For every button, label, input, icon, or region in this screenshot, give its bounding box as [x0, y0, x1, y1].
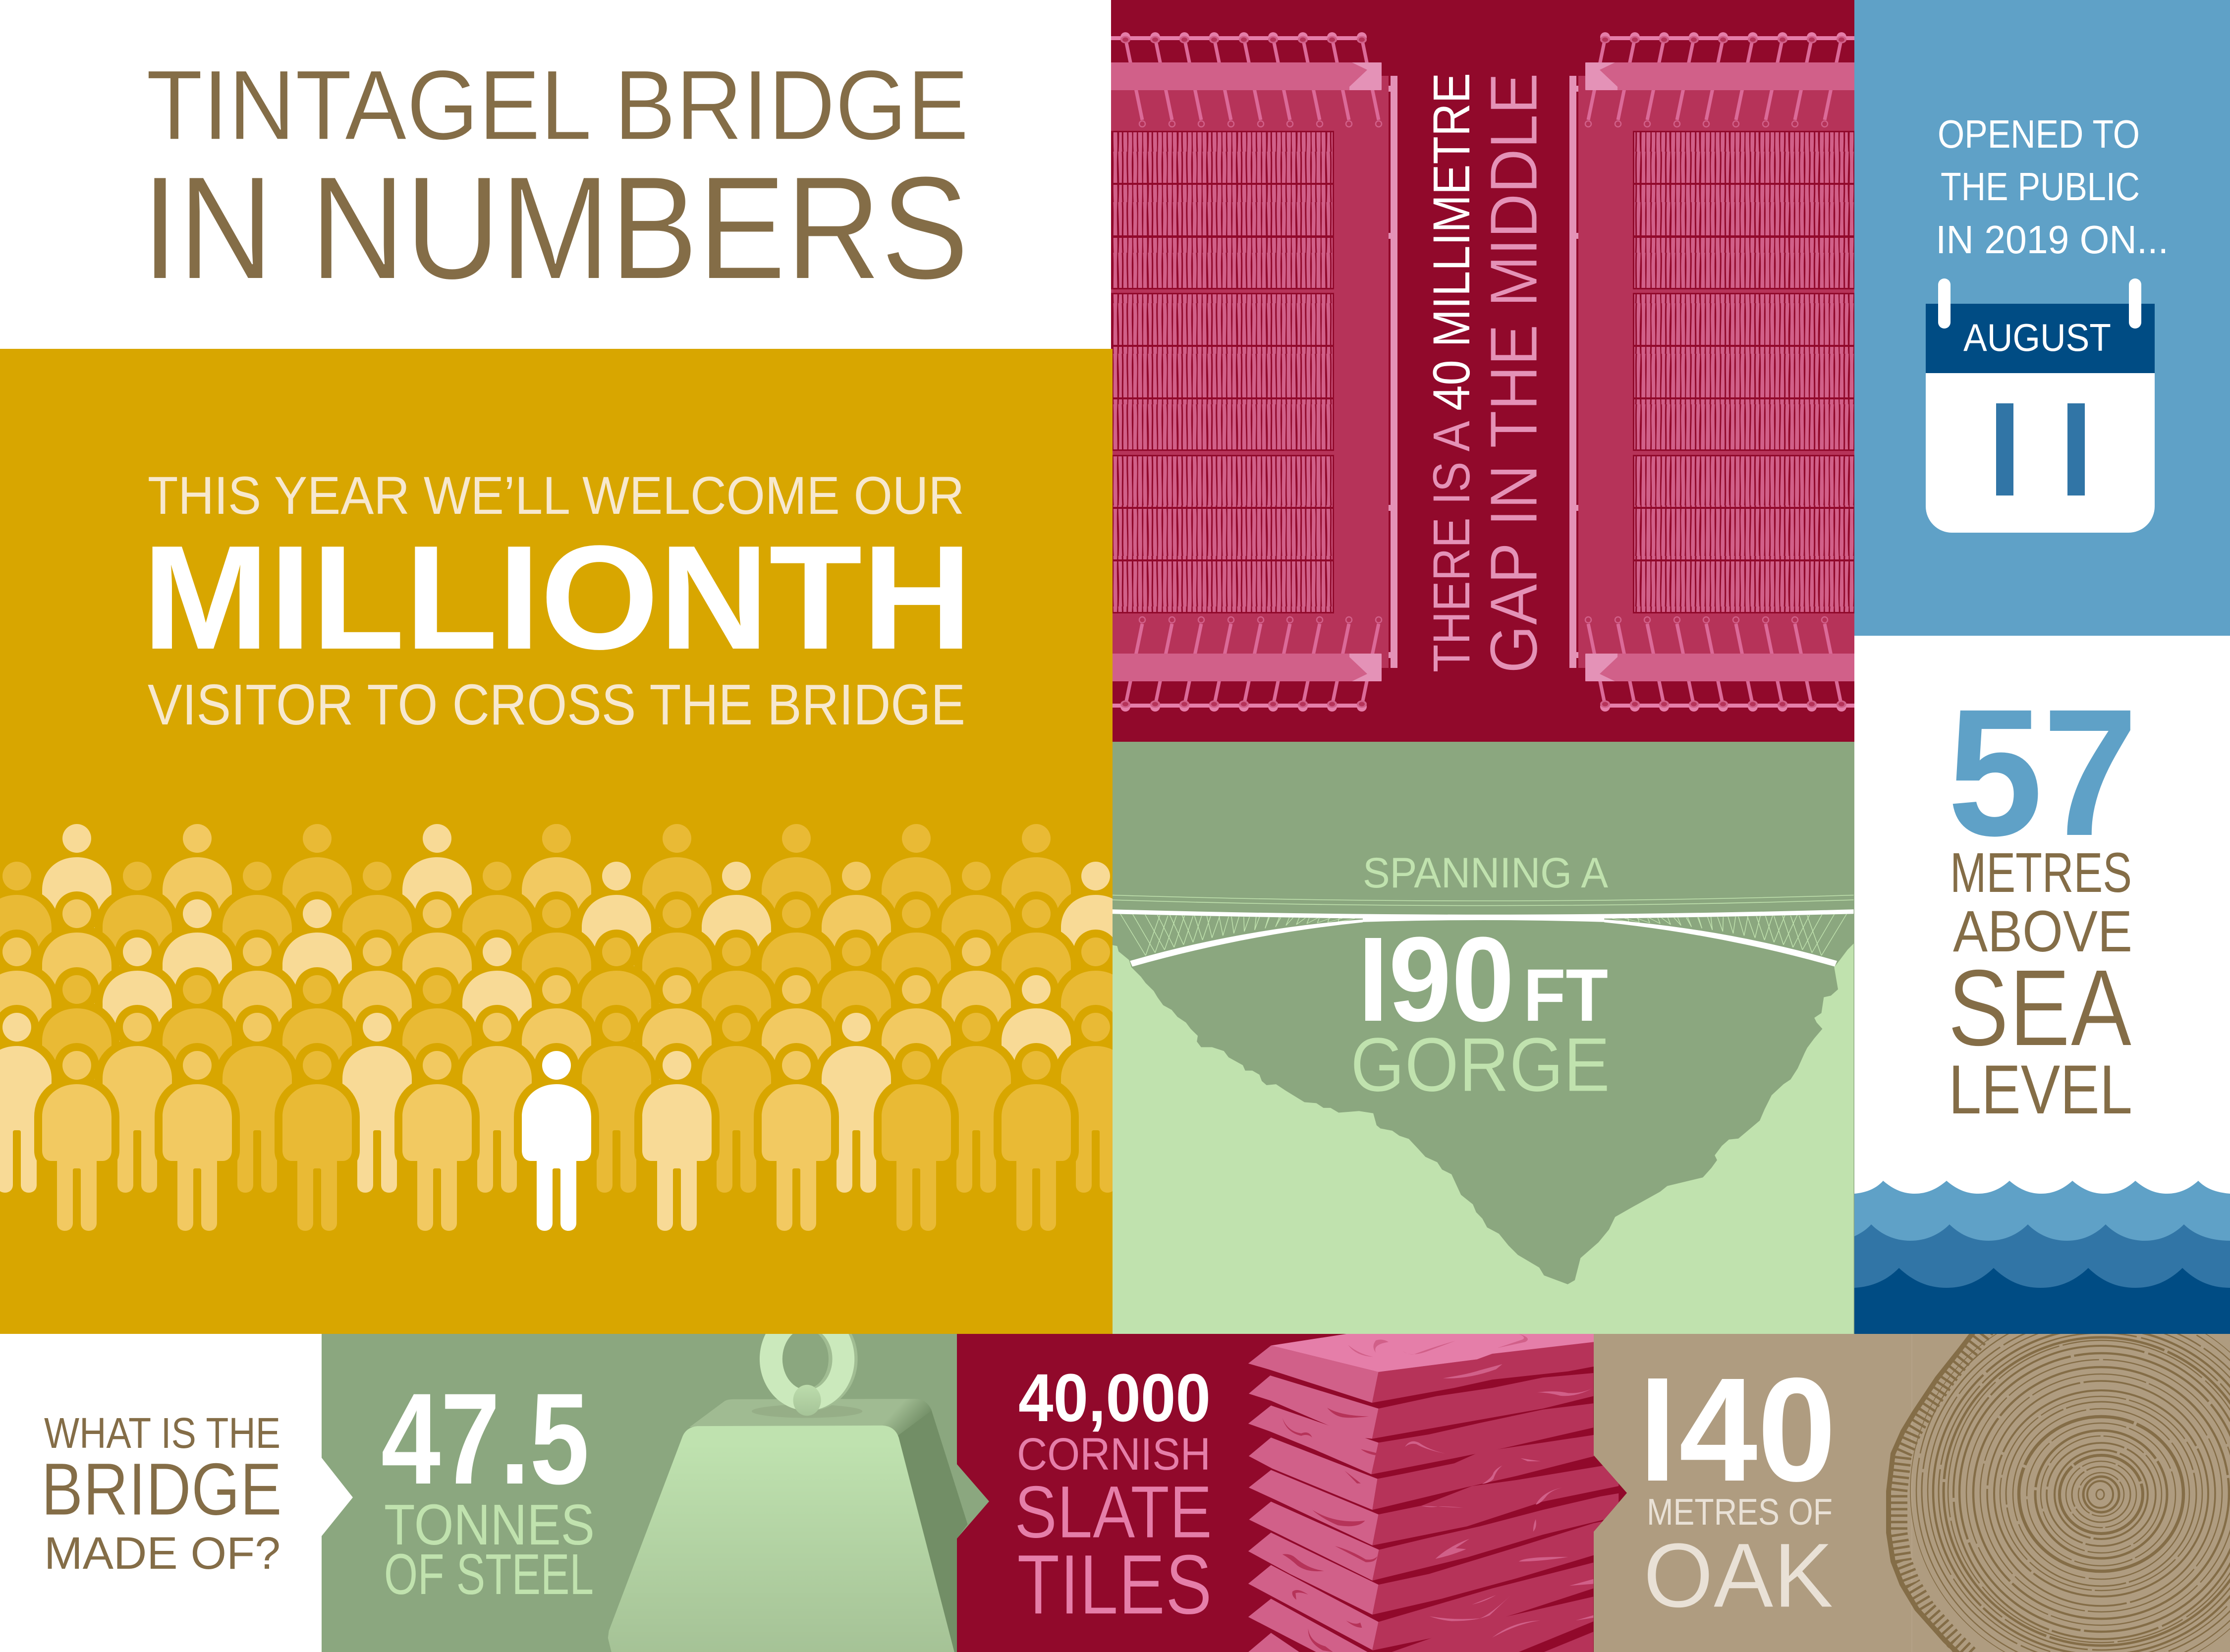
text: opened to the public	[1936, 112, 2169, 262]
text: gorge: GORGE	[1350, 1022, 1610, 1107]
bridge deck halves	[1090, 32, 1877, 712]
panel: oak	[1594, 1303, 2230, 1652]
text: oak: OAK	[1643, 1525, 1834, 1627]
text: metres above sea level	[1948, 841, 2132, 1128]
panel: title	[0, 0, 1111, 349]
weight front	[608, 1426, 955, 1652]
growth rings	[1910, 1303, 2230, 1652]
number: 47.5: 47.5	[381, 1366, 589, 1511]
illustration: tree rings	[1889, 1303, 2230, 1652]
weight ring	[763, 1307, 858, 1411]
text: of steel: OF STEEL	[384, 1542, 594, 1606]
number: 140: 1	[1615, 1347, 1697, 1512]
text: this year we'll welcome our: THIS YEAR WE’LL WELCOME OUR	[148, 465, 964, 525]
heading: millionth: MILLIONTH	[142, 515, 972, 680]
text: metres above sea level: SEA	[1948, 946, 2132, 1069]
number: 190 ft: 1	[1333, 912, 1400, 1046]
arrow: white pointer	[322, 1458, 353, 1536]
heading: in numbers: IN NUMBERS	[142, 146, 969, 310]
bridge deck and arch	[1113, 909, 1854, 967]
text: what is the bridge made of?: MADE OF?	[44, 1528, 280, 1579]
illustration: weight	[608, 1307, 968, 1652]
panel: slate tiles	[957, 1332, 1644, 1652]
text: metres above sea level: ABOVE	[1953, 899, 2132, 964]
panel: millionth visitor	[0, 349, 1130, 1334]
weight shadow	[752, 1405, 862, 1418]
text: metres above sea level: LEVEL	[1949, 1050, 2132, 1128]
weight top	[689, 1399, 932, 1435]
weight side	[881, 1399, 968, 1652]
text: tonnes: TONNES	[384, 1492, 595, 1557]
text: gap in the middle: GAP IN THE MIDDLE	[1476, 73, 1551, 673]
bark	[1889, 1328, 1986, 1652]
calendar day: 11	[1965, 375, 2111, 524]
text: metres of: METRES OF	[1647, 1491, 1833, 1533]
panel: gorge	[1113, 742, 1854, 1334]
text: tiles: TILES	[1017, 1537, 1212, 1632]
white figure: millionth visitor	[522, 1051, 591, 1231]
top tile	[1271, 1332, 1644, 1372]
calendar month: AUGUST	[1963, 316, 2111, 359]
illustration: stack of slate tiles	[1248, 1332, 1644, 1652]
icon: calendar	[1926, 278, 2155, 533]
number: 190 ft	[1365, 936, 1608, 1022]
number: 40,000: 40,000	[1018, 1360, 1211, 1436]
text: metres above sea level: METRES	[1950, 841, 2132, 904]
number: 140	[1615, 1347, 1836, 1512]
number: 140: 40	[1679, 1347, 1836, 1512]
text: opened to the public: OPENED TO	[1938, 112, 2140, 156]
text: opened to the public: THE PUBLIC	[1941, 165, 2140, 209]
text: what is the bridge made of?: BRIDGE	[41, 1447, 282, 1531]
panel: opening date	[1854, 0, 2230, 636]
weight knob	[793, 1385, 821, 1416]
panel: height above sea level	[1854, 636, 2230, 1334]
suspension cables	[1113, 895, 1854, 906]
text: opened to the public: IN 2019 ON...	[1936, 218, 2169, 262]
number: 57: 57	[1948, 672, 2138, 874]
waves	[1854, 1181, 2230, 1334]
text: cornish: CORNISH	[1017, 1429, 1211, 1480]
text: visitor to cross the bridge: VISITOR TO CROSS THE BRIDGE	[148, 672, 965, 737]
panel: what is the bridge made of	[0, 1334, 322, 1652]
crowd of people	[0, 824, 1130, 1231]
heading: Tintagel Bridge: TINTAGEL BRIDGE	[146, 50, 969, 161]
text: slate: SLATE	[1014, 1470, 1212, 1553]
text: there is a 40 millimetre: THERE IS A 40 MILLIMETRE	[1423, 73, 1481, 672]
text: what is the bridge made of?	[41, 1409, 282, 1579]
number: 190 ft: FT	[1523, 953, 1608, 1037]
tile surface marks	[1348, 1334, 1593, 1638]
number: 190 ft: 90	[1389, 912, 1514, 1046]
text: what is the bridge made of?: WHAT IS THE	[44, 1409, 280, 1457]
panel: bridge gap from above	[1090, 0, 1877, 742]
panel: tonnes of steel	[322, 1307, 989, 1652]
bridge lattice	[1120, 914, 1846, 955]
gorge illustration	[1113, 895, 1854, 1334]
cliffs	[1113, 943, 1854, 1334]
tile layers	[1248, 1345, 1379, 1652]
text: spanning a: SPANNING A	[1363, 849, 1609, 897]
